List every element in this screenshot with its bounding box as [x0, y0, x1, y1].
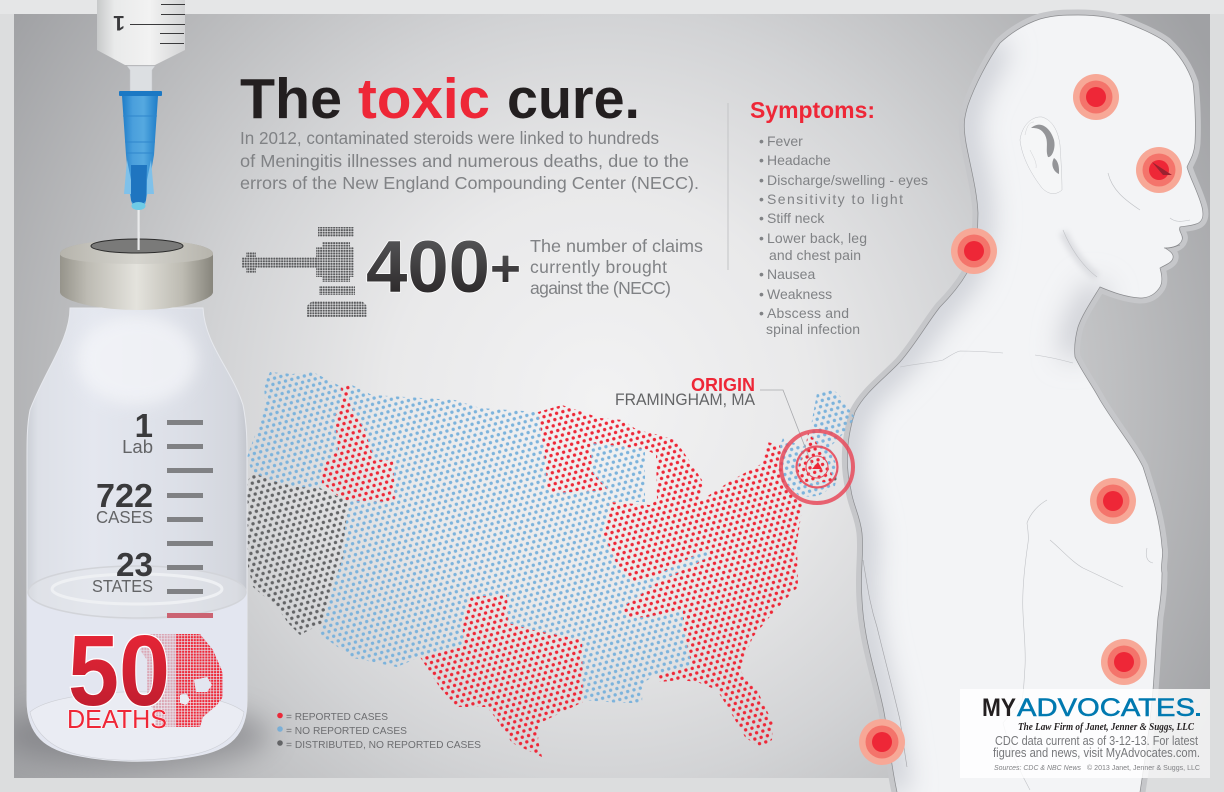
- stat: 1 lab: 1: [135, 407, 153, 444]
- logo and source panel: [960, 689, 1210, 778]
- symptoms list: •: [759, 172, 764, 188]
- bottle base: [30, 692, 244, 760]
- map legend: = REPORTED CASES: [286, 711, 388, 723]
- region: Idaho and Utah, reported cases: [322, 385, 395, 502]
- syringe barrel: [97, 0, 185, 65]
- title: toxic: [358, 67, 490, 131]
- region: west coast, distributed without reported cases: [247, 472, 350, 635]
- intro paragraph: errors of the New England Compounding Center (NECC).: [240, 173, 699, 193]
- syringe: [97, 0, 185, 251]
- symptoms list: Fever: [767, 133, 803, 149]
- intro paragraph: [240, 128, 699, 193]
- map legend: = NO REPORTED CASES: [286, 725, 407, 737]
- icon: gavel: [242, 227, 367, 317]
- symptoms list: Sensitivity to light: [767, 191, 903, 207]
- symptoms list: •: [759, 305, 764, 321]
- region: Midwest and East, reported cases: [538, 405, 803, 748]
- origin label: FRAMINGHAM, MA: [615, 391, 755, 409]
- symptoms list: •: [759, 191, 764, 207]
- stat: 1 lab: [122, 407, 153, 457]
- body outline halo: [847, 15, 1203, 792]
- stat: 400+ claims: 400: [366, 227, 490, 308]
- symptoms list: spinal infection: [766, 321, 860, 337]
- liquid: [27, 592, 247, 761]
- needle hub: [122, 96, 158, 208]
- symptom locator: chest: [1090, 478, 1136, 524]
- stat: 400+ claims: +: [490, 240, 521, 298]
- symptoms list: Nausea: [767, 266, 815, 282]
- stat: 722 cases: 722: [96, 477, 153, 514]
- stat: 23 states: STATES: [92, 576, 153, 596]
- origin label: ORIGIN: [691, 375, 755, 395]
- origin label: [615, 375, 755, 409]
- symptoms list: Discharge/swelling - eyes: [767, 172, 928, 188]
- map legend: = DISTRIBUTED, NO REPORTED CASES: [286, 739, 481, 751]
- medicine bottle: [27, 232, 247, 761]
- title: cure.: [507, 67, 640, 131]
- symptoms list: •: [759, 210, 764, 226]
- region: central, no reported cases: [318, 385, 707, 703]
- barrel numeral: 1: [113, 11, 125, 34]
- logo tagline: The Law Firm of Janet, Jenner & Suggs, LLC: [1018, 721, 1195, 733]
- sources line: [994, 763, 1201, 772]
- stat: 50 deaths: DEATHS: [67, 706, 167, 734]
- syringe nozzle: [127, 66, 155, 91]
- icon: skull: [140, 634, 223, 727]
- origin leader line and target rings: [760, 390, 853, 503]
- intro paragraph: of Meningitis illnesses and numerous deaths, due to the: [240, 151, 689, 171]
- human body figure: [840, 0, 1224, 792]
- body fill and inner shading: [840, 0, 1224, 792]
- symptoms list: Lower back, leg: [767, 230, 867, 246]
- symptoms list: Abscess and: [767, 305, 849, 321]
- symptoms heading: Symptoms:: [750, 97, 875, 123]
- sources line: Sources: CDC & NBC News: [994, 763, 1081, 772]
- region: Massachusetts area, reported cases: [797, 433, 835, 482]
- logo wordmark: MY: [982, 694, 1016, 722]
- sources line: © 2013 Janet, Jenner & Suggs, LLC: [1087, 763, 1201, 772]
- region: Texas, reported cases: [420, 595, 583, 757]
- intro paragraph: In 2012, contaminated steroids were linked to hundreds: [240, 128, 659, 148]
- ear: [1020, 117, 1062, 194]
- symptom locator: eye: [1136, 147, 1182, 193]
- symptoms list: •: [759, 266, 764, 282]
- stat: 1 lab: Lab: [122, 436, 153, 457]
- data note: [993, 734, 1200, 760]
- symptoms list: •: [759, 152, 764, 168]
- title: [240, 67, 640, 131]
- claims description: against the (NECC): [530, 278, 671, 298]
- needle: [138, 210, 140, 251]
- stat: 23 states: 23: [116, 546, 153, 583]
- symptoms list: Headache: [767, 152, 831, 168]
- symptoms list: •: [759, 133, 764, 149]
- data note: CDC data current as of 3-12-13. For latest: [995, 734, 1198, 748]
- stat: 23 states: [92, 546, 153, 596]
- body contour line: [847, 15, 1203, 792]
- symptom locator: abdomen: [1101, 639, 1147, 685]
- graduation ticks: [167, 420, 213, 618]
- region: New England, no reported cases: [780, 390, 855, 497]
- liquid surface: [28, 566, 246, 618]
- symptoms list: Stiff neck: [767, 210, 825, 226]
- aluminium cap: [60, 240, 213, 310]
- title: The: [240, 67, 342, 131]
- stat: 50 deaths: 50: [68, 615, 170, 727]
- symptoms list: •: [759, 286, 764, 302]
- glass body: [27, 308, 247, 761]
- data note: figures and news, visit MyAdvocates.com.: [993, 746, 1200, 760]
- dot map of the United States: [247, 372, 855, 757]
- symptoms list: Weakness: [767, 286, 832, 302]
- claims description: [530, 236, 703, 298]
- stat: 722 cases: CASES: [96, 507, 153, 527]
- logo and source panel: ADVOCATES: [1017, 694, 1195, 722]
- symptoms list: [759, 133, 928, 337]
- symptoms list: •: [759, 230, 764, 246]
- symptom locator: lower back: [859, 719, 905, 765]
- region: northwest, no reported cases: [247, 372, 343, 488]
- bottle shadow: [0, 703, 270, 767]
- claims description: currently brought: [530, 257, 667, 277]
- symptom locator: neck: [951, 228, 997, 274]
- symptom locator: forehead: [1073, 74, 1119, 120]
- face and torso lines: [863, 173, 1190, 790]
- map legend: [277, 711, 481, 751]
- symptoms list: and chest pain: [769, 247, 861, 263]
- claims description: The number of claims: [530, 236, 703, 256]
- shoulder highlight: [77, 315, 197, 405]
